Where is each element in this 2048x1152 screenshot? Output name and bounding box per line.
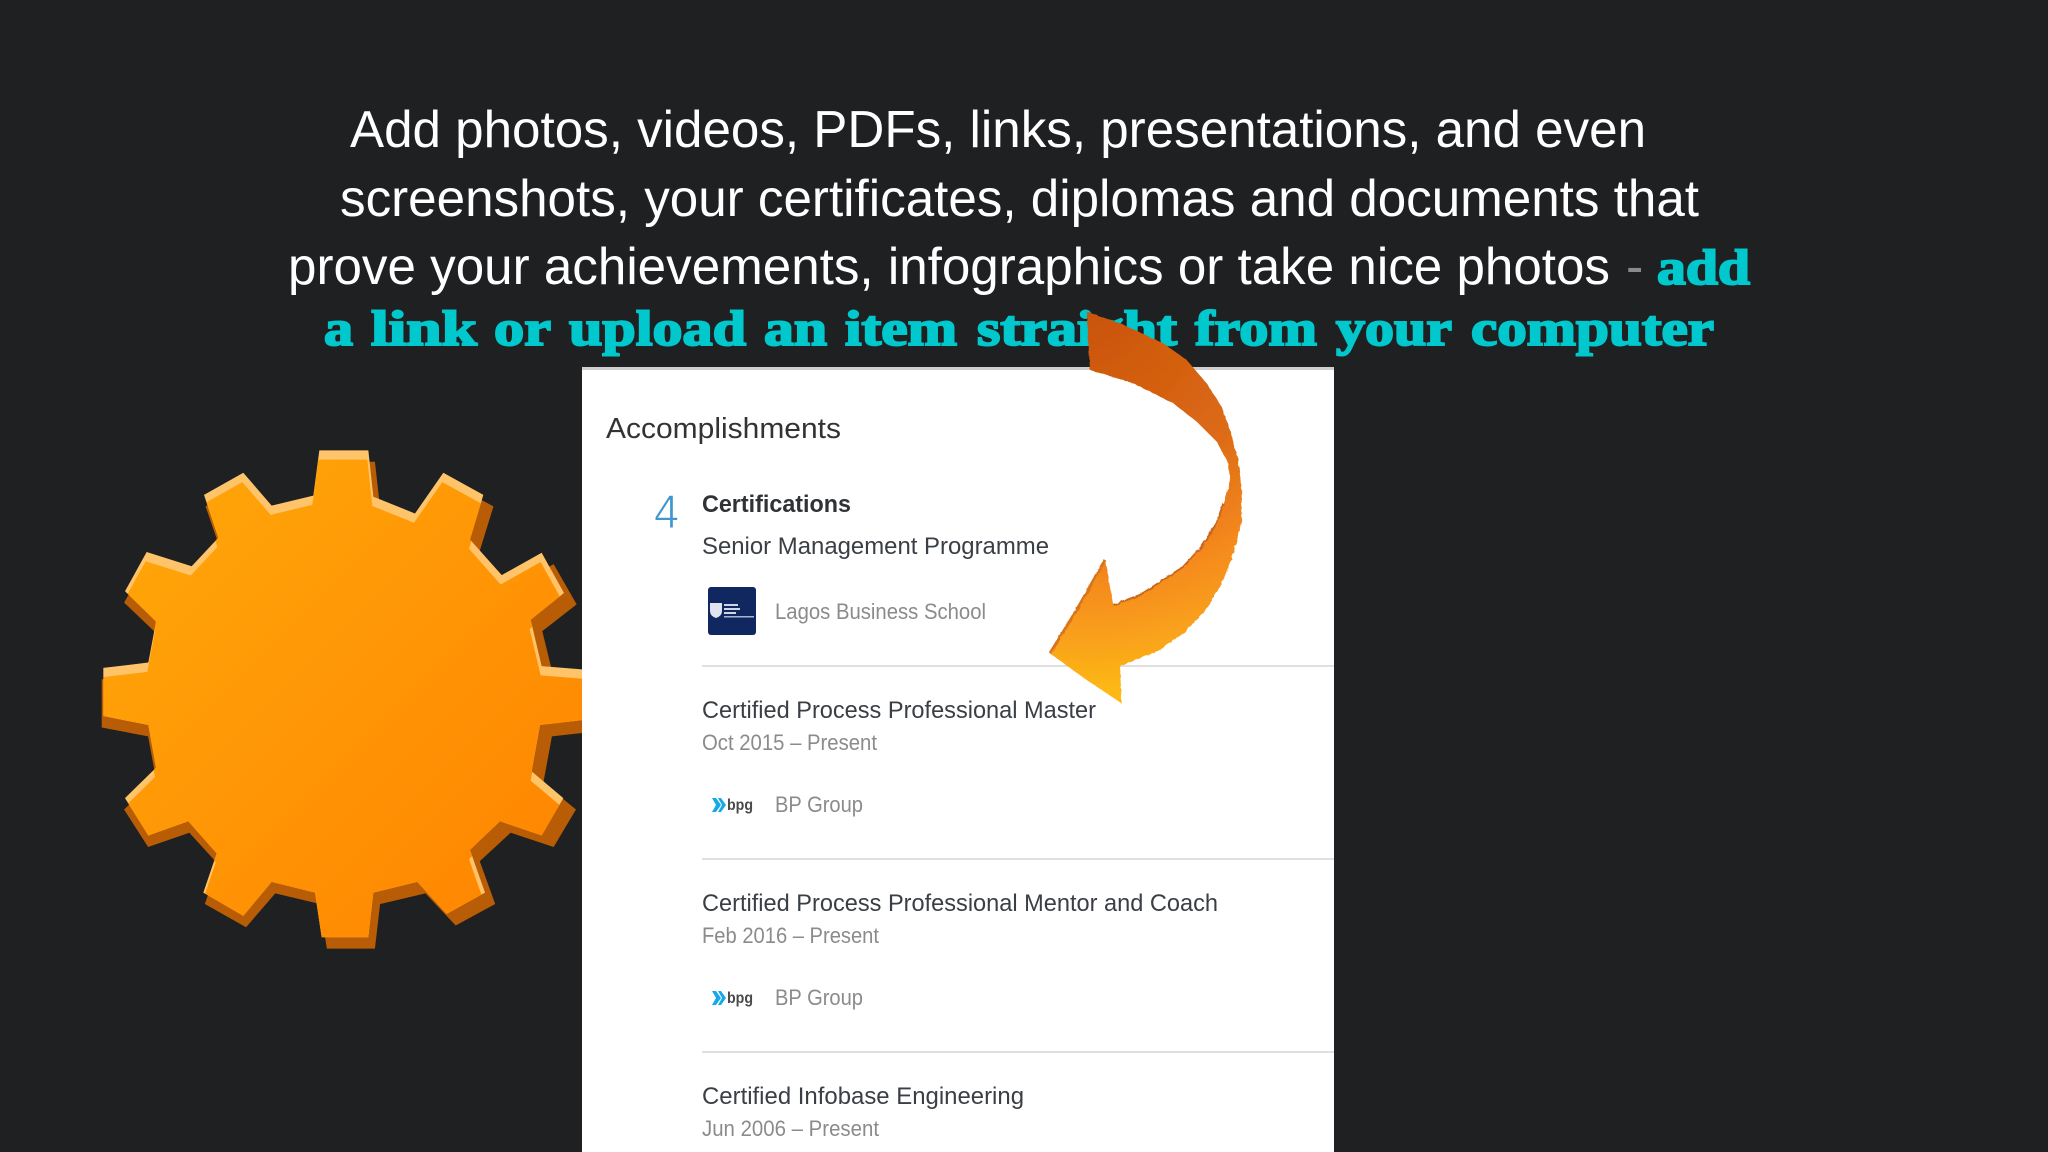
logo: bpg: bpg	[727, 797, 753, 814]
certification: Certified Infobase Engineering	[702, 1083, 1024, 1141]
heading text: screenshots, your certificates, diplomas and documents that	[340, 170, 1700, 228]
heading text: add	[1657, 239, 1750, 295]
arrow: curved orange	[1050, 312, 1242, 703]
heading text: item	[845, 300, 957, 356]
certification: Certified Process Professional Mentor and Coach: Certified Process Professional Mentor and Coach	[702, 890, 1218, 917]
heading text: straight	[977, 300, 1177, 356]
section title: Certifications	[702, 491, 851, 518]
heading text: or	[494, 300, 551, 356]
heading text: upload	[569, 300, 746, 356]
card heading: Accomplishments	[606, 413, 841, 445]
certification: Senior Management Programme: Lagos Business School	[775, 599, 986, 624]
certification: Certified Process Professional Mentor and Coach: BP Group	[775, 985, 863, 1010]
certification: Certified Process Professional Mentor and Coach: Feb 2016 – Present	[702, 923, 879, 948]
certification: Senior Management Programme: Senior Management Programme	[702, 533, 1049, 560]
certification: Certified Process Professional Master: BP Group	[775, 792, 863, 817]
panel: accomplishments card	[582, 367, 1334, 1152]
heading text: an	[764, 300, 827, 356]
certification: Certified Process Professional Master: Oct 2015 – Present	[702, 730, 877, 755]
count number: 4	[654, 485, 679, 538]
logo: bpg: bpg	[727, 990, 753, 1007]
heading text: computer	[1471, 300, 1714, 356]
heading text	[288, 101, 1750, 356]
certification: Certified Process Professional Mentor and Coach	[702, 890, 1218, 1010]
logo: Lagos Business School	[708, 587, 756, 635]
logo: bpg	[712, 797, 753, 814]
heading text: a	[324, 300, 353, 356]
heading text: prove your achievements, infographics or take nice photos	[288, 238, 1610, 296]
certification: Certified Process Professional Master	[702, 697, 1096, 817]
certification: Certified Infobase Engineering: Certified Infobase Engineering	[702, 1083, 1024, 1110]
certification: Certified Infobase Engineering: Jun 2006 – Present	[702, 1116, 879, 1141]
certification: Senior Management Programme	[702, 533, 1049, 635]
heading text: -	[1626, 238, 1643, 296]
heading text: from	[1195, 300, 1317, 356]
heading text: link	[371, 300, 477, 356]
certification: Certified Process Professional Master: Certified Process Professional Master	[702, 697, 1096, 724]
icon: orange gear	[102, 450, 600, 949]
heading text: Add photos, videos, PDFs, links, presentations, and even	[350, 101, 1646, 159]
logo: bpg	[712, 990, 753, 1007]
heading text: your	[1336, 300, 1452, 356]
